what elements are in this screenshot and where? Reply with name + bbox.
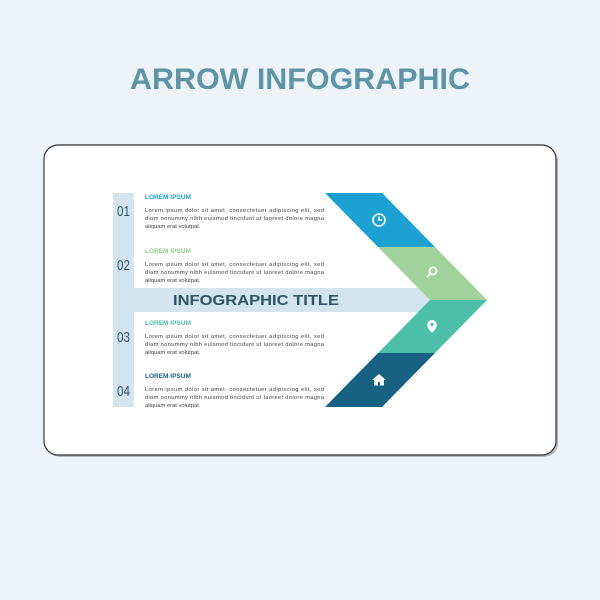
title band: [113, 288, 435, 312]
step 02: 02: [117, 257, 130, 274]
step 02: aliquam erat volutpat.: [145, 278, 201, 284]
step 04: Lorem ipsum dolor sit amet, consectetuer adipiscing elit, sed: [145, 387, 324, 393]
step 03: aliquam erat volutpat.: [145, 350, 201, 356]
step 02: diam nonummy nibh euismod tincidunt ut laoreet dolore magna: [145, 270, 325, 276]
icon: home: [372, 374, 386, 386]
step 01: [117, 194, 325, 230]
step 03: LOREM IPSUM: [145, 320, 191, 327]
step 01: Lorem ipsum dolor sit amet, consectetuer adipiscing elit, sed: [145, 208, 324, 214]
step 04: LOREM IPSUM: [145, 373, 191, 380]
step 01: 01: [117, 203, 130, 220]
vertical number bar: [113, 193, 134, 407]
icon: location pin: [427, 320, 437, 333]
step 03: diam nonummy nibh euismod tincidunt ut laoreet dolore magna: [145, 342, 325, 348]
step 04: [117, 373, 325, 409]
step 02: [117, 248, 325, 284]
step 01: LOREM IPSUM: [145, 194, 191, 201]
icon: clock: [373, 214, 385, 226]
step 03: 03: [117, 329, 130, 346]
step 02: Lorem ipsum dolor sit amet, consectetuer adipiscing elit, sed: [145, 262, 324, 268]
step 04: diam nonummy nibh euismod tincidunt ut laoreet dolore magna: [145, 395, 325, 401]
step 04: aliquam erat volutpat.: [145, 403, 201, 409]
infographic title text: INFOGRAPHIC TITLE: [173, 292, 339, 309]
step 03: [117, 320, 325, 356]
step 01: diam nonummy nibh euismod tincidunt ut laoreet dolore magna: [145, 216, 325, 222]
icon: search: [427, 267, 437, 277]
panel: card: [44, 145, 558, 457]
step 02: LOREM IPSUM: [145, 248, 191, 255]
step 04: 04: [117, 383, 130, 400]
title: ARROW INFOGRAPHIC: [130, 63, 470, 96]
step 01: aliquam erat volutpat.: [145, 224, 201, 230]
step 03: Lorem ipsum dolor sit amet, consectetuer adipiscing elit, sed: [145, 334, 324, 340]
chevron arrow: [325, 193, 487, 407]
